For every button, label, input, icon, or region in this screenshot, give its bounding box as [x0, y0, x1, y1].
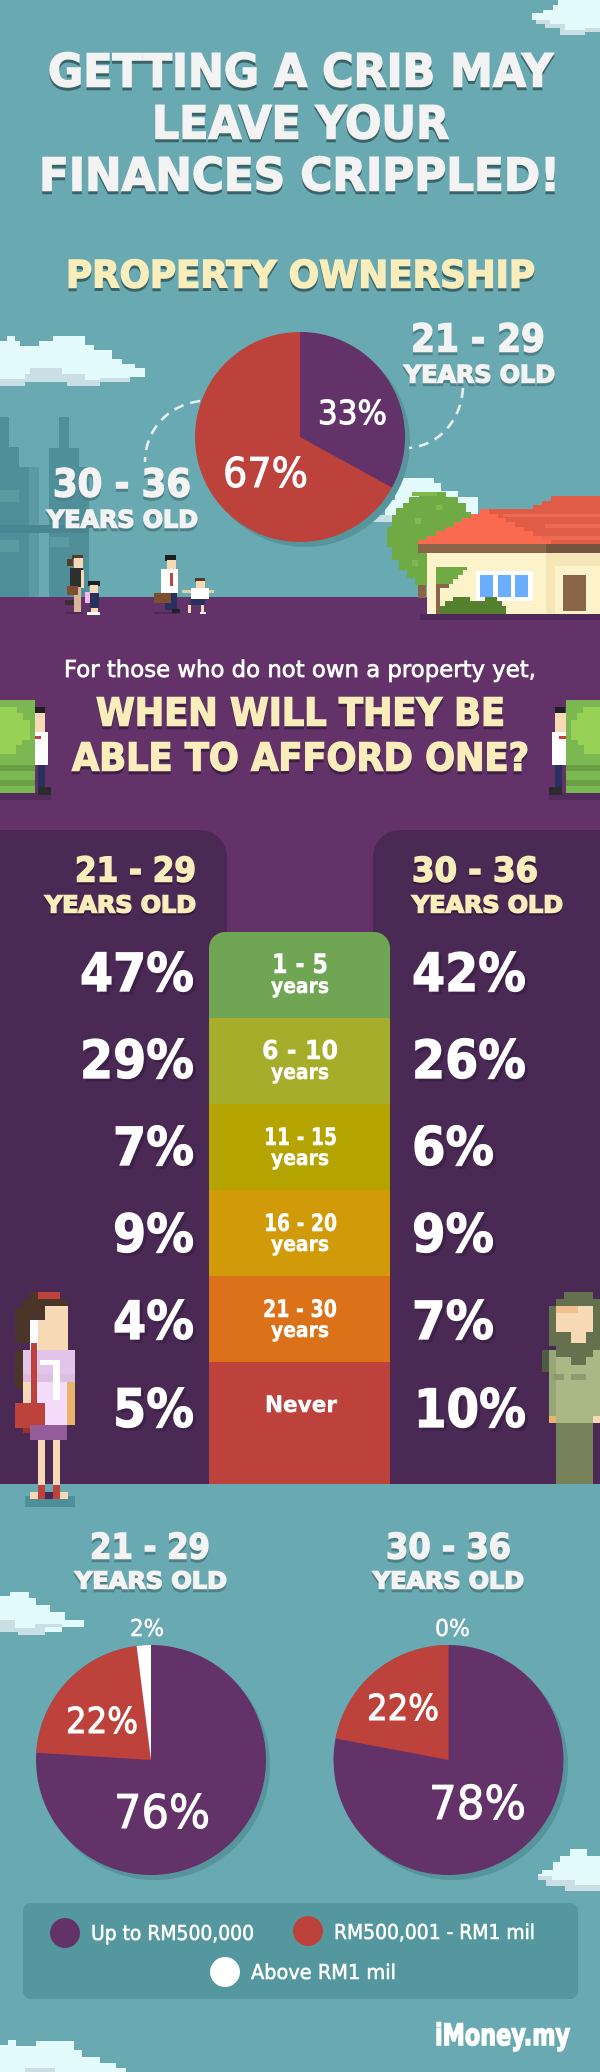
heading: property ownership: PROPERTY OWNERSHIP — [66, 253, 535, 296]
age label: lower 21-29: YEARS OLD — [74, 1568, 227, 1594]
band label: 1-5 years — [271, 949, 329, 998]
heading: when will they be able to afford one: WHEN WILL THEY BE — [96, 690, 505, 734]
band label: 21-30 years: 21 - 30 — [263, 1295, 337, 1323]
percentages: 30-36: 42% — [412, 943, 526, 1004]
tree — [387, 492, 471, 598]
percentages: 21-29: 7% — [113, 1117, 194, 1178]
column header: 21-29: 21 - 29 — [75, 850, 196, 890]
percentages: 21-29 — [80, 943, 194, 1440]
age label: lower 30-36 — [372, 1527, 524, 1594]
pie chart: 21-29 budget — [36, 1616, 270, 1880]
pie chart: property ownership — [195, 332, 410, 547]
age label: 30-36: YEARS OLD — [46, 505, 198, 533]
title: LEAVE YOUR — [152, 96, 449, 149]
percentages: 21-29: 5% — [113, 1379, 194, 1440]
purple section background — [0, 597, 600, 1484]
cloud: top right — [532, 0, 600, 35]
column header: 30-36: YEARS OLD — [411, 892, 563, 918]
pie label: 22%: 22% — [66, 1701, 138, 1742]
panel: 21-29 column — [0, 830, 300, 1484]
cloud: bottom left — [0, 2040, 126, 2072]
house — [418, 496, 600, 620]
percentages: 30-36: 7% — [412, 1291, 494, 1352]
centre timeline bar — [209, 932, 390, 1484]
percentages: 30-36 — [412, 943, 526, 1440]
cloud: mid left — [0, 1592, 84, 1635]
age label: lower 30-36: YEARS OLD — [372, 1568, 524, 1594]
age label: 30-36 — [46, 461, 198, 533]
age label: 30-36: 30 - 36 — [53, 461, 191, 505]
pie label: 22%: 22% — [367, 1688, 439, 1729]
band label: 11-15 years: years — [271, 1146, 329, 1170]
age label: 21-29: YEARS OLD — [403, 360, 555, 388]
panel: 30-36 column — [300, 830, 600, 1484]
character: young woman — [15, 1292, 75, 1507]
column header: 30-36 — [411, 850, 563, 918]
age label: lower 30-36: 30 - 36 — [386, 1527, 511, 1567]
percentages: 21-29: 47% — [80, 943, 194, 1004]
band label: 6-10 years: years — [271, 1060, 329, 1084]
subtitle: For those who do not own a property yet, — [64, 657, 536, 683]
age label: lower 21-29: 21 - 29 — [90, 1527, 210, 1567]
band label: never: Never — [265, 1393, 337, 1418]
character: man in hood — [542, 1292, 600, 1484]
pie chart: 30-36 budget — [334, 1616, 568, 1880]
percentages: 21-29: 4% — [113, 1291, 194, 1352]
percentages: 30-36: 10% — [414, 1379, 526, 1440]
cloud: lower right — [538, 1849, 600, 1891]
dashed connector: 21-29 — [409, 388, 463, 448]
band label: 16-20 years — [264, 1209, 337, 1256]
cloud: behind tree — [369, 478, 478, 522]
legend item: above RM1 mil: Above RM1 mil — [251, 1960, 396, 1984]
pie label: 33%: 33% — [318, 393, 387, 432]
column header: 30-36: 30 - 36 — [412, 850, 538, 890]
column header: 21-29: YEARS OLD — [44, 892, 196, 918]
title: FINANCES CRIPPLED! — [39, 148, 560, 201]
pie label: 67%: 67% — [223, 449, 308, 497]
cloud: left — [0, 336, 145, 386]
bush — [440, 597, 506, 614]
band label: 1-5 years: years — [271, 974, 329, 998]
money stack and man: left — [0, 700, 51, 800]
band label: 21-30 years: years — [271, 1318, 329, 1342]
legend item: RM500,001 - RM1 mil — [293, 1916, 535, 1946]
legend item: above RM1 mil — [210, 1957, 396, 1987]
money stack and man: right — [549, 700, 600, 800]
pie label: 0%: 0% — [435, 1616, 470, 1642]
pie label: 2%: 2% — [130, 1616, 164, 1642]
band label: 11-15 years — [264, 1123, 337, 1170]
band label: 16-20 years: years — [271, 1232, 329, 1256]
percentages: 21-29: 9% — [113, 1204, 194, 1265]
age label: 21-29 — [403, 316, 555, 388]
band label: 6-10 years — [262, 1036, 338, 1084]
people: man and child — [154, 555, 214, 614]
house window — [476, 571, 533, 601]
legend item: up to RM500,000: Up to RM500,000 — [91, 1921, 254, 1945]
band label: 16-20 years: 16 - 20 — [264, 1209, 337, 1237]
percentages: 21-29: 29% — [80, 1030, 194, 1091]
pie label: 78%: 78% — [429, 1776, 526, 1830]
title: GETTING A CRIB MAY — [48, 44, 554, 97]
people: woman and child — [65, 555, 100, 615]
title — [39, 44, 560, 201]
percentages: 30-36: 26% — [412, 1030, 526, 1091]
pie label: 76%: 76% — [114, 1785, 210, 1839]
age label: 21-29: 21 - 29 — [411, 316, 545, 360]
band label: 1-5 years: 1 - 5 — [272, 949, 328, 980]
house door — [563, 575, 586, 611]
percentages: 30-36: 6% — [412, 1117, 494, 1178]
legend — [23, 1903, 578, 1999]
city skyline — [0, 417, 89, 597]
band label: 21-30 years — [263, 1295, 337, 1342]
band label: 6-10 years: 6 - 10 — [262, 1036, 338, 1066]
dashed connector: 30-36 — [145, 401, 200, 462]
age label: lower 21-29 — [74, 1527, 227, 1594]
percentages: 30-36: 9% — [412, 1204, 494, 1265]
heading: when will they be able to afford one — [72, 690, 529, 779]
heading: when will they be able to afford one: ABLE TO AFFORD ONE? — [72, 735, 529, 779]
band label: 11-15 years: 11 - 15 — [264, 1123, 337, 1151]
column header: 21-29 — [44, 850, 196, 918]
legend item: RM500,001 - RM1 mil: RM500,001 - RM1 mil — [334, 1920, 535, 1944]
legend item: up to RM500,000 — [50, 1918, 254, 1948]
vine — [436, 567, 467, 584]
